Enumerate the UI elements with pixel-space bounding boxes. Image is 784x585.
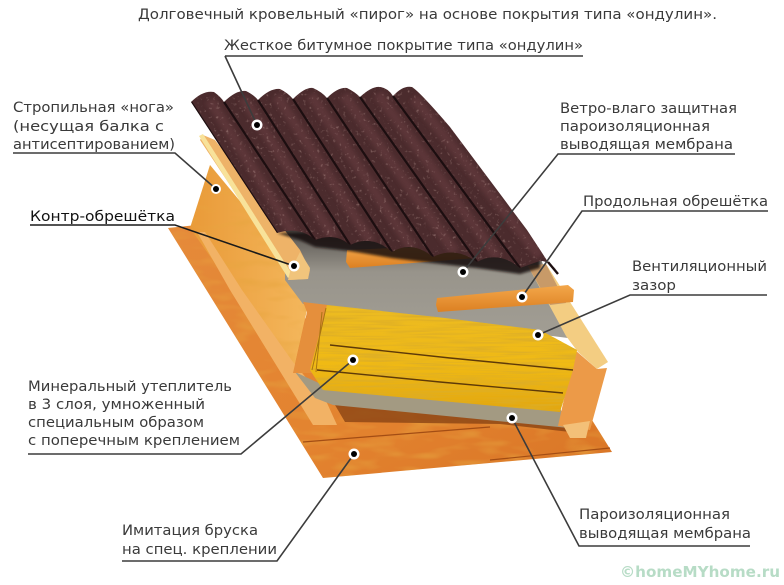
lower membrane [295,372,569,428]
label: rafter: антисептированием) [13,137,175,153]
leader: longitudinal batten [516,211,768,302]
leader: vapour membrane [506,412,750,546]
label: mineral insulation [28,379,240,449]
batten blocks under roof [203,140,276,232]
label: timber imitation: Имитация бруска [122,523,258,539]
label: wind membrane [560,101,737,153]
label: mineral insulation: Минеральный утеплитель [28,379,232,395]
right rafter [528,264,608,438]
roof cross-section illustration [160,80,620,482]
mineral insulation [310,305,577,412]
label: ventilation gap: зазор [632,278,676,294]
label: mineral insulation: специальным образом [28,415,204,431]
roof shadow [277,230,540,274]
leader: rafter [13,153,221,194]
left rafter side [190,165,307,364]
label: timber imitation: на спец. креплении [122,542,277,558]
label: vapour membrane: выводящая мембрана [579,526,751,542]
leader: ventilation gap [532,295,767,340]
title: Долговечный кровельный «пирог» на основе покрытия типа «ондулин». [138,7,717,23]
label: vapour membrane: Пароизоляционная [579,507,730,523]
label: ventilation gap [632,259,767,294]
label: wind membrane: выводящая мембрана [560,137,733,153]
watermark: ©homeMYhome.ru [620,563,780,581]
leader: mineral insulation [28,354,358,454]
upper membrane [285,228,568,338]
label: ventilation gap: Вентиляционный [632,259,767,275]
leader: wind membrane [458,154,735,278]
label: mineral insulation: в 3 слоя, умноженный [28,397,205,413]
counter batten [199,134,310,280]
lower longitudinal batten [436,285,574,312]
label: wind membrane: Ветро-влаго защитная [560,101,737,117]
label: ondulin covering: Жесткое битумное покрытие типа «ондулин» [224,38,583,54]
label: longitudinal batten: Продольная обрешётка [583,194,768,210]
corrugated bitumen roof [185,80,565,275]
bottom plank imitation timber [160,220,620,482]
label: rafter: Стропильная «нога» [13,100,174,116]
label: vapour membrane [579,507,751,542]
inner rafter end [293,302,328,373]
label: timber imitation [122,523,277,558]
label: wind membrane: пароизоляционная [560,119,710,135]
lower rafter strip [197,232,337,425]
label: counter batten: Контр-обрешётка [30,209,175,225]
leader: ondulin covering [225,56,583,130]
leader: timber imitation [122,448,360,561]
label: rafter [13,100,175,153]
label: mineral insulation: с поперечным креплением [28,433,240,449]
leader: counter batten [30,225,300,272]
label: rafter: (несущая балка с [13,119,164,135]
upper longitudinal batten [346,246,476,268]
